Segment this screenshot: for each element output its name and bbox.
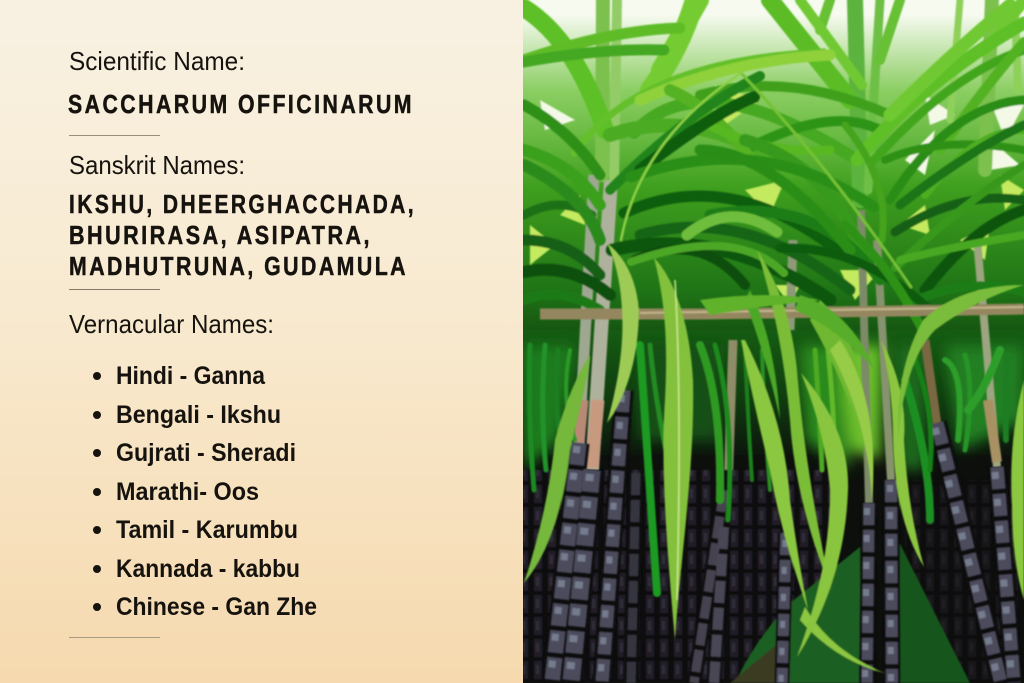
text: sanskrit names list: [69, 189, 416, 281]
heading: scientific name: Scientific Name:: [69, 46, 245, 76]
list: vernacular names: Marathi- Oos: [116, 478, 259, 506]
text: sanskrit names list: MADHUTRUNA, GUDAMULA: [69, 251, 408, 281]
sky behind leaves: [523, 0, 1024, 121]
horizontal bamboo pole: [540, 309, 1024, 314]
list: vernacular names: Chinese - Gan Zhe: [116, 593, 317, 621]
arching leaves middle layer: [524, 73, 1024, 335]
list: vernacular names: [93, 362, 317, 621]
ground grass: [735, 547, 860, 683]
panel: text background: [0, 0, 523, 683]
drooping lower leaves: [524, 243, 1024, 673]
text: saccharum officinarum: SACCHARUM OFFICINARUM: [68, 89, 414, 119]
dark lower canopy: [523, 338, 1024, 455]
heading: sanskrit names: Sanskrit Names:: [69, 150, 245, 180]
bottom darkness: [523, 455, 1024, 683]
arching leaves back layer: [524, 0, 1024, 260]
upright blades: [602, 0, 1024, 200]
dark segmented canes: [550, 390, 1014, 683]
list: vernacular names: Hindi - Ganna: [116, 362, 266, 390]
text: sanskrit names list: BHURIRASA, ASIPATRA,: [69, 220, 372, 250]
hanging thin fronds: [530, 345, 1008, 593]
list: vernacular names: Kannada - kabbu: [116, 555, 300, 583]
text: sanskrit names list: IKSHU, DHEERGHACCHADA,: [69, 189, 416, 219]
list: vernacular names: Tamil - Karumbu: [116, 516, 298, 544]
background canes: [523, 470, 833, 683]
list: vernacular names: Gujrati - Sheradi: [116, 439, 296, 467]
foliage mass: [523, 15, 1024, 360]
white gaps: [540, 95, 1024, 175]
soft colour patches of lower canopy: [523, 345, 575, 470]
list: vernacular names: Bengali - Ikshu: [116, 401, 281, 429]
pale upper stalks: [579, 175, 997, 503]
heading: vernacular names: Vernacular Names:: [69, 309, 274, 339]
photo: sugarcane plantation: [523, 0, 1024, 683]
bright lime gaps: [530, 85, 1024, 305]
